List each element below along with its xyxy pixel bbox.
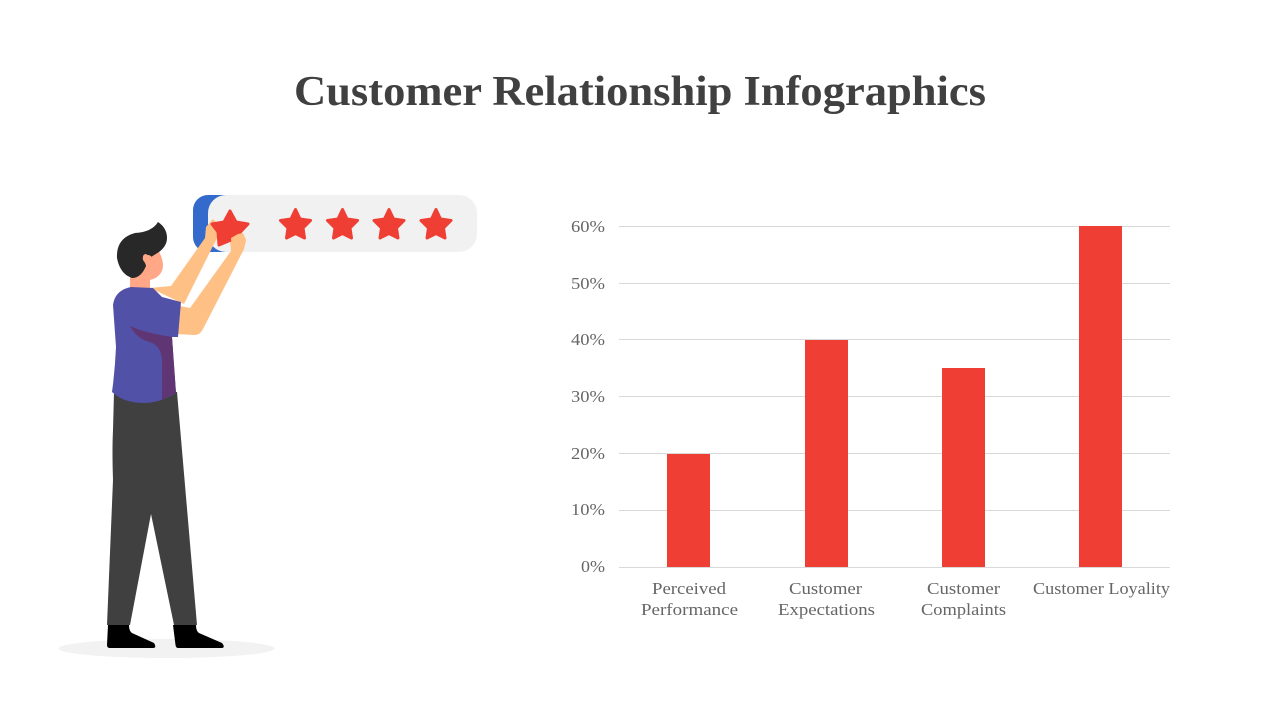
y axis labels: 10%	[571, 500, 605, 519]
y axis labels: 30%	[571, 387, 605, 406]
face	[138, 250, 163, 280]
x axis labels: Complaints	[921, 600, 1006, 619]
y axis labels: 20%	[571, 444, 605, 463]
near arm	[175, 233, 246, 335]
y axis labels: 60%	[571, 217, 605, 236]
ear	[144, 255, 152, 263]
y axis labels: 50%	[571, 274, 605, 293]
hair	[117, 222, 167, 278]
held star	[212, 211, 248, 245]
y axis labels: 40%	[571, 330, 605, 349]
x axis labels: Customer Loyality	[1033, 579, 1171, 598]
x axis labels: Perceived	[652, 579, 727, 598]
y axis labels	[571, 217, 605, 576]
bars	[667, 226, 1122, 567]
x axis labels: Performance	[641, 600, 738, 619]
x axis labels	[641, 579, 1171, 619]
title: Customer Relationship Infographics	[294, 69, 986, 115]
trousers	[107, 392, 197, 625]
rating panel	[193, 195, 477, 252]
grid lines	[619, 226, 1170, 568]
fingers over star	[231, 233, 246, 250]
shirt	[112, 287, 181, 403]
ground shadow	[58, 639, 274, 658]
illustration: person rating with stars	[58, 195, 477, 658]
shoes	[107, 625, 155, 648]
rating stars	[280, 210, 451, 238]
y axis labels: 0%	[581, 557, 605, 576]
x axis labels: Customer	[927, 579, 1000, 598]
x axis labels: Expectations	[778, 600, 875, 619]
bar chart	[571, 217, 1171, 619]
neck	[130, 270, 150, 290]
x axis labels: Customer	[789, 579, 862, 598]
far arm	[150, 219, 219, 304]
shirt shadow	[130, 326, 176, 400]
